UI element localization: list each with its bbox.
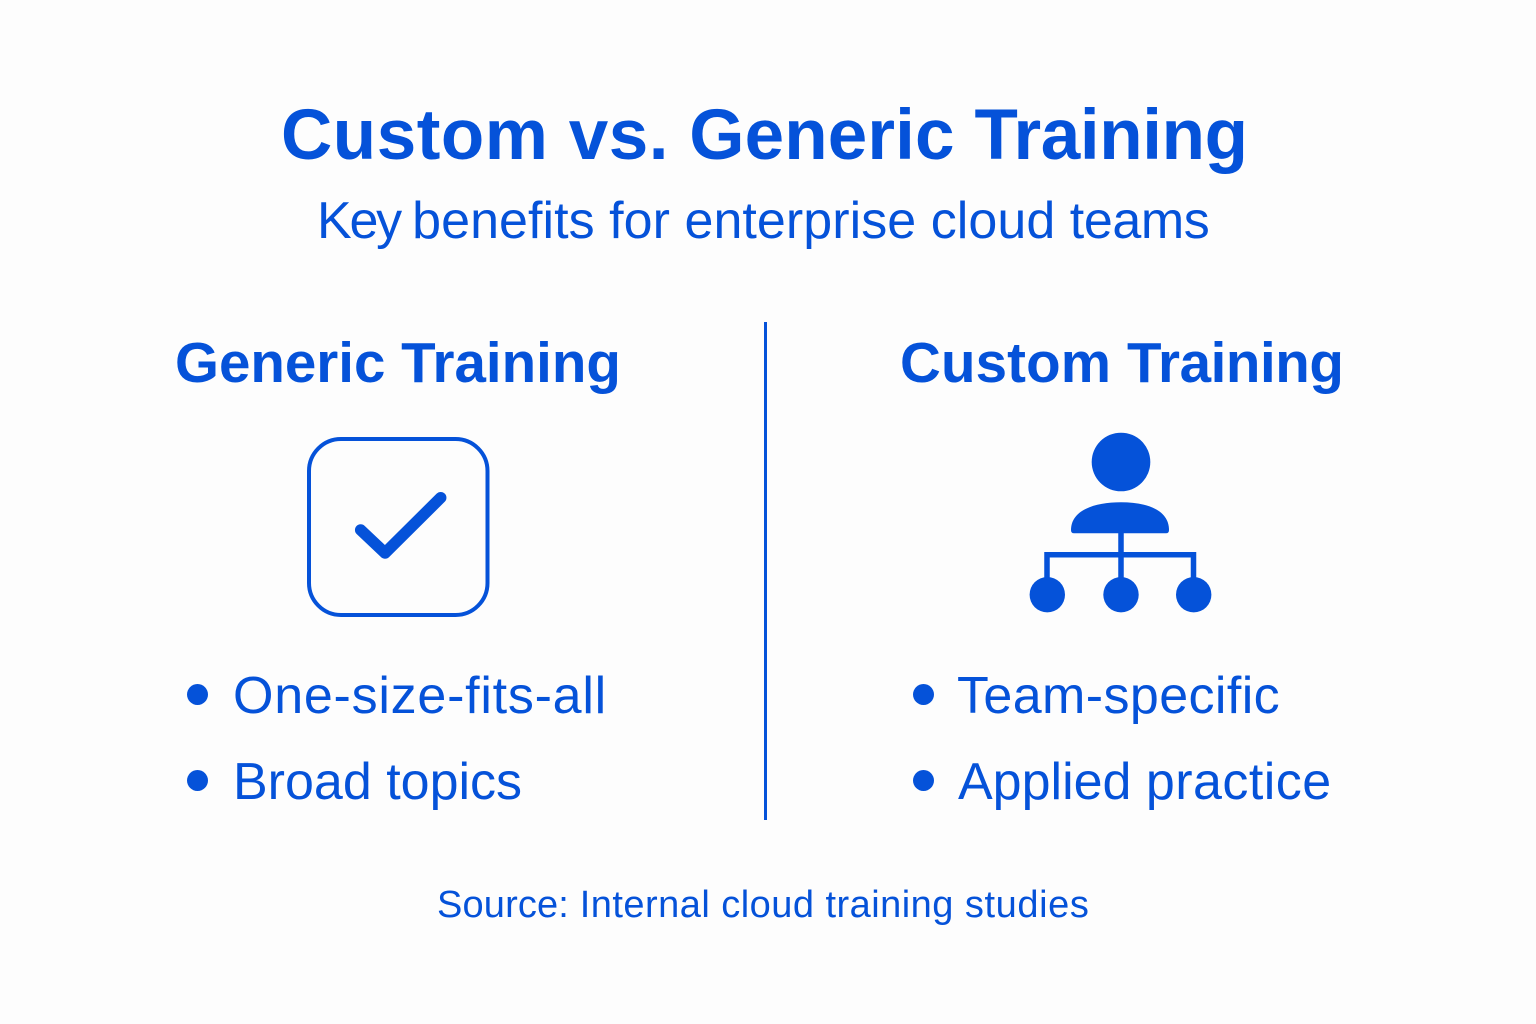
bullet: one-size-fits-all <box>187 684 208 705</box>
divider <box>764 322 767 820</box>
panel: custom training <box>900 331 1344 811</box>
heading: generic training: Generic Training <box>175 331 621 394</box>
panel: generic training <box>175 331 621 811</box>
text: applied practice: Applied practice <box>958 753 1332 811</box>
text: broad topics: Broad topics <box>233 753 522 811</box>
bullet: broad topics <box>187 770 208 791</box>
bullet list: generic <box>187 667 607 811</box>
bullet list: custom <box>913 667 1332 811</box>
bullet: team-specific <box>913 684 934 705</box>
title: Custom vs. Generic Training <box>281 96 1248 175</box>
text: team-specific: Team-specific <box>957 667 1280 725</box>
subtitle: Key benefits for enterprise cloud teams <box>317 192 1209 250</box>
icon: checkbox with check <box>307 437 490 617</box>
source note: Source: Internal cloud training studies <box>437 884 1090 926</box>
icon: person with org tree <box>1030 432 1212 612</box>
bullet: applied practice <box>913 770 934 791</box>
heading: custom training: Custom Training <box>900 331 1344 394</box>
text: one-size-fits-all: One-size-fits-all <box>233 667 607 725</box>
